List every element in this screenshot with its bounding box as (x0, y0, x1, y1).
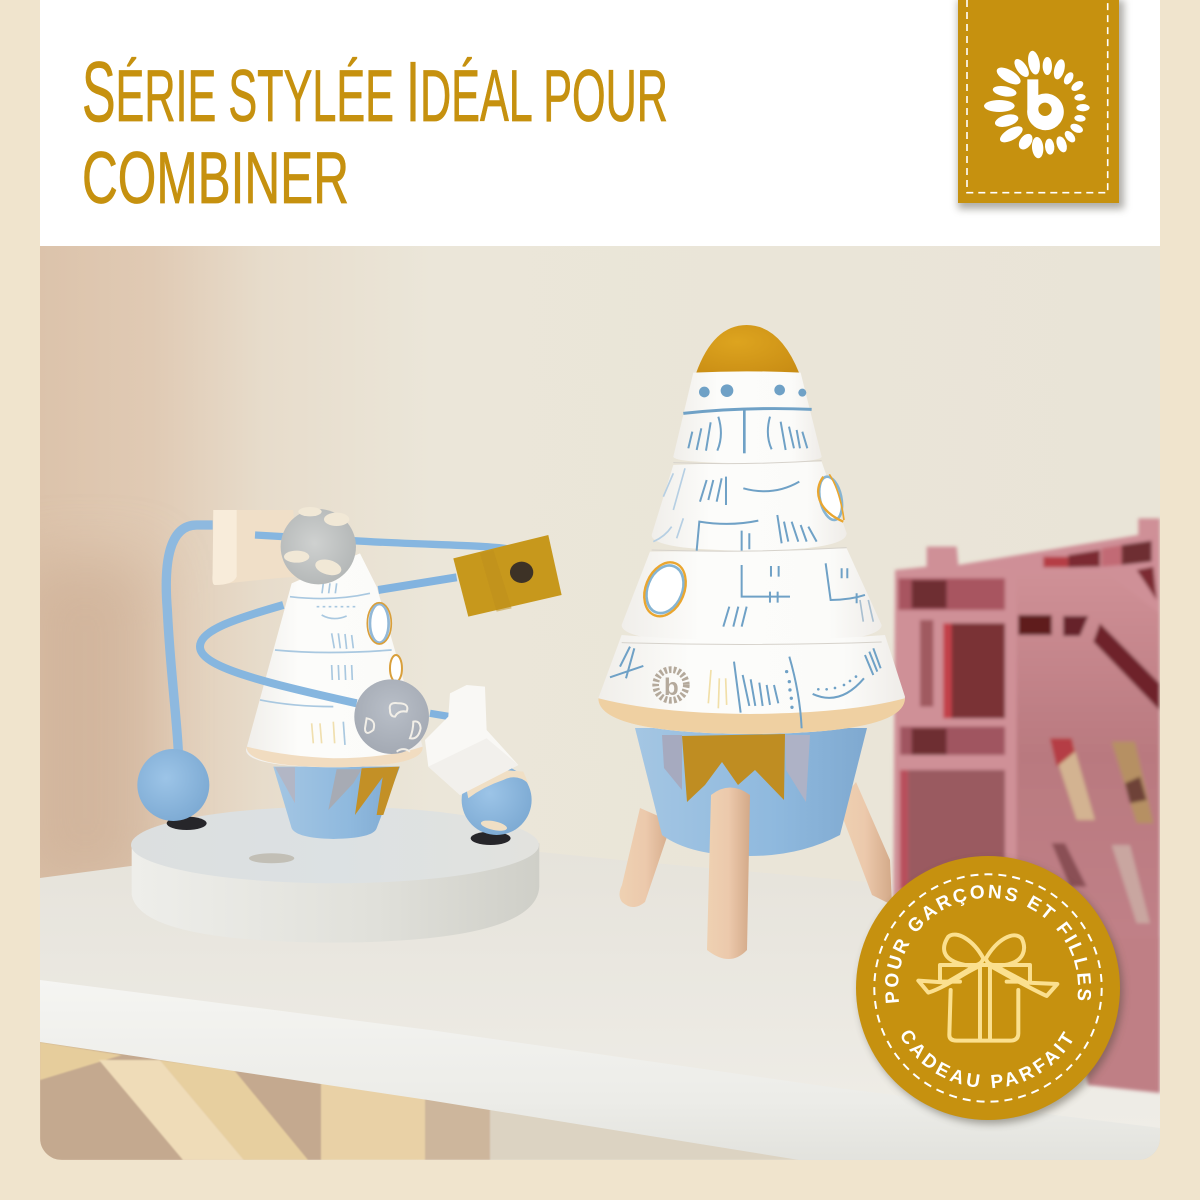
shelf top surface (40, 852, 1160, 1130)
upper wire (254, 531, 508, 550)
pegs (167, 817, 207, 830)
badge: cadeau parfait (854, 856, 1126, 1128)
title: COMBINER (82, 138, 349, 219)
flame (682, 734, 785, 802)
astronaut bead (425, 685, 532, 835)
beaded wire toy (131, 507, 562, 943)
back lower wire (378, 577, 457, 590)
painted pattern (610, 409, 881, 728)
white header panel (40, 0, 1160, 246)
cone pattern (260, 583, 392, 745)
tier separation shadows (622, 461, 882, 644)
tier 3 (622, 548, 882, 644)
wood block (230, 510, 294, 583)
badge curved text top: POUR GARÇONS ET FILLES (885, 884, 1092, 1003)
tier 4 (598, 635, 905, 734)
mustard block (453, 535, 562, 617)
blue body (635, 728, 867, 856)
base disc (131, 807, 539, 943)
white cone (246, 553, 423, 767)
gray bead upper (281, 507, 356, 584)
below-shelf wood frame (40, 1042, 797, 1160)
tier 2 (652, 462, 847, 551)
title (82, 45, 668, 219)
gray bead lower (354, 679, 429, 754)
pink crate (893, 518, 1160, 1093)
stacking rocket (598, 325, 905, 959)
shelf front edge (40, 980, 1160, 1160)
icon: sunflower logo (984, 50, 1090, 159)
front leg (707, 788, 750, 959)
logo tag (958, 0, 1124, 209)
blue ball (137, 749, 209, 821)
stacking rocket: b (664, 674, 679, 701)
title: SÉRIE STYLÉE IDÉAL POUR (82, 45, 668, 140)
photo: toys on a shelf (20, 246, 1160, 1200)
blue cone base (273, 767, 400, 839)
tier 1 (673, 371, 822, 463)
rear legs (620, 808, 666, 907)
left wire (166, 525, 213, 752)
cap (696, 325, 799, 373)
front lower wire (200, 605, 357, 703)
wall background (40, 246, 1160, 1160)
icon: gift box (918, 935, 1057, 1041)
badge curved text bottom: CADEAU PARFAIT (902, 1030, 1072, 1088)
